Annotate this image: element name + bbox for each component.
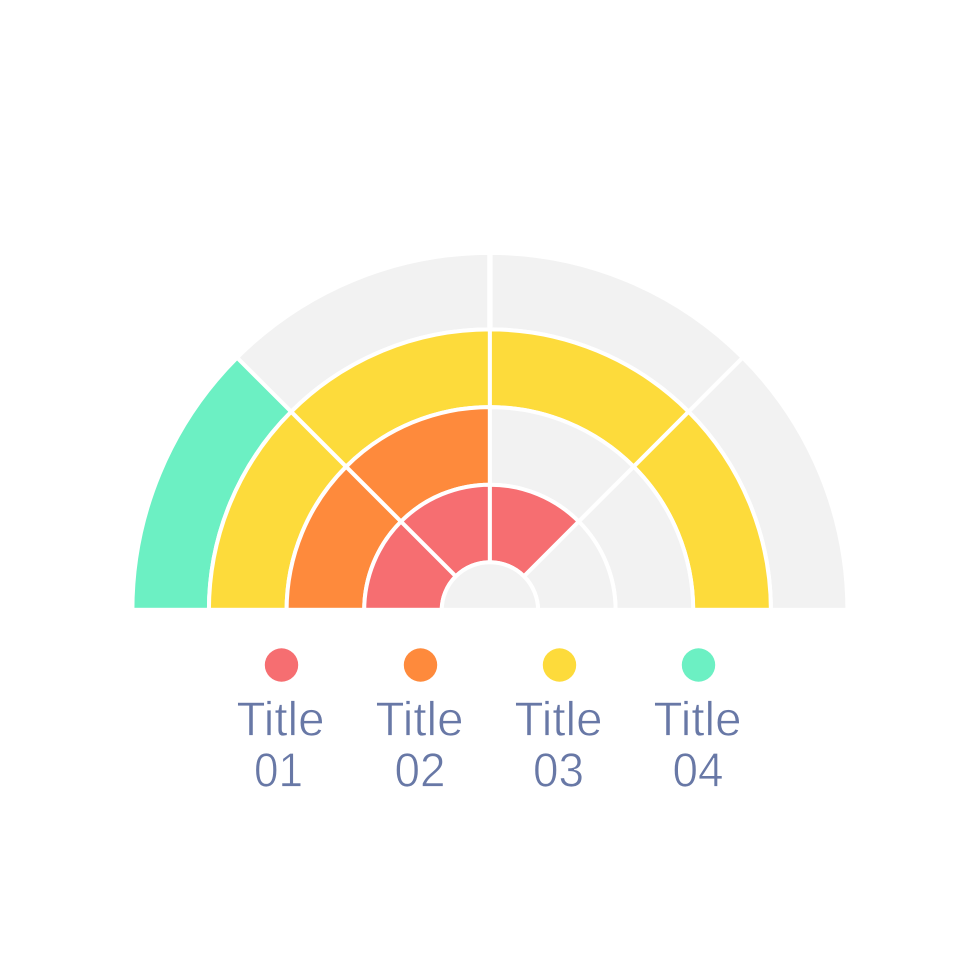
- legend item: Title 03: [514, 648, 602, 798]
- legend item: Title 03: Title: [514, 694, 602, 746]
- ring 2: two of four segments filled: [287, 407, 693, 610]
- legend item: Title 01: Title: [236, 694, 324, 746]
- legend item: Title 04: [654, 648, 742, 798]
- semicircular ring chart: [120, 252, 860, 620]
- legend item: Title 01: [236, 648, 324, 798]
- legend item: Title 04: 04: [672, 744, 724, 798]
- legend item: Title 04: Title: [654, 694, 742, 746]
- legend item: Title 02: Title: [376, 694, 464, 746]
- legend item: Title 01: 01: [254, 744, 303, 798]
- ring 4: outer, one of four segments filled: [132, 252, 847, 610]
- center hub: [442, 562, 538, 610]
- legend item: Title 02: 02: [394, 744, 446, 798]
- ring 1: three of four segments filled: [364, 485, 616, 610]
- legend item: Title 02: [376, 648, 464, 798]
- ring 3: all four segments filled: [209, 329, 771, 610]
- legend item: Title 03: 03: [533, 744, 584, 798]
